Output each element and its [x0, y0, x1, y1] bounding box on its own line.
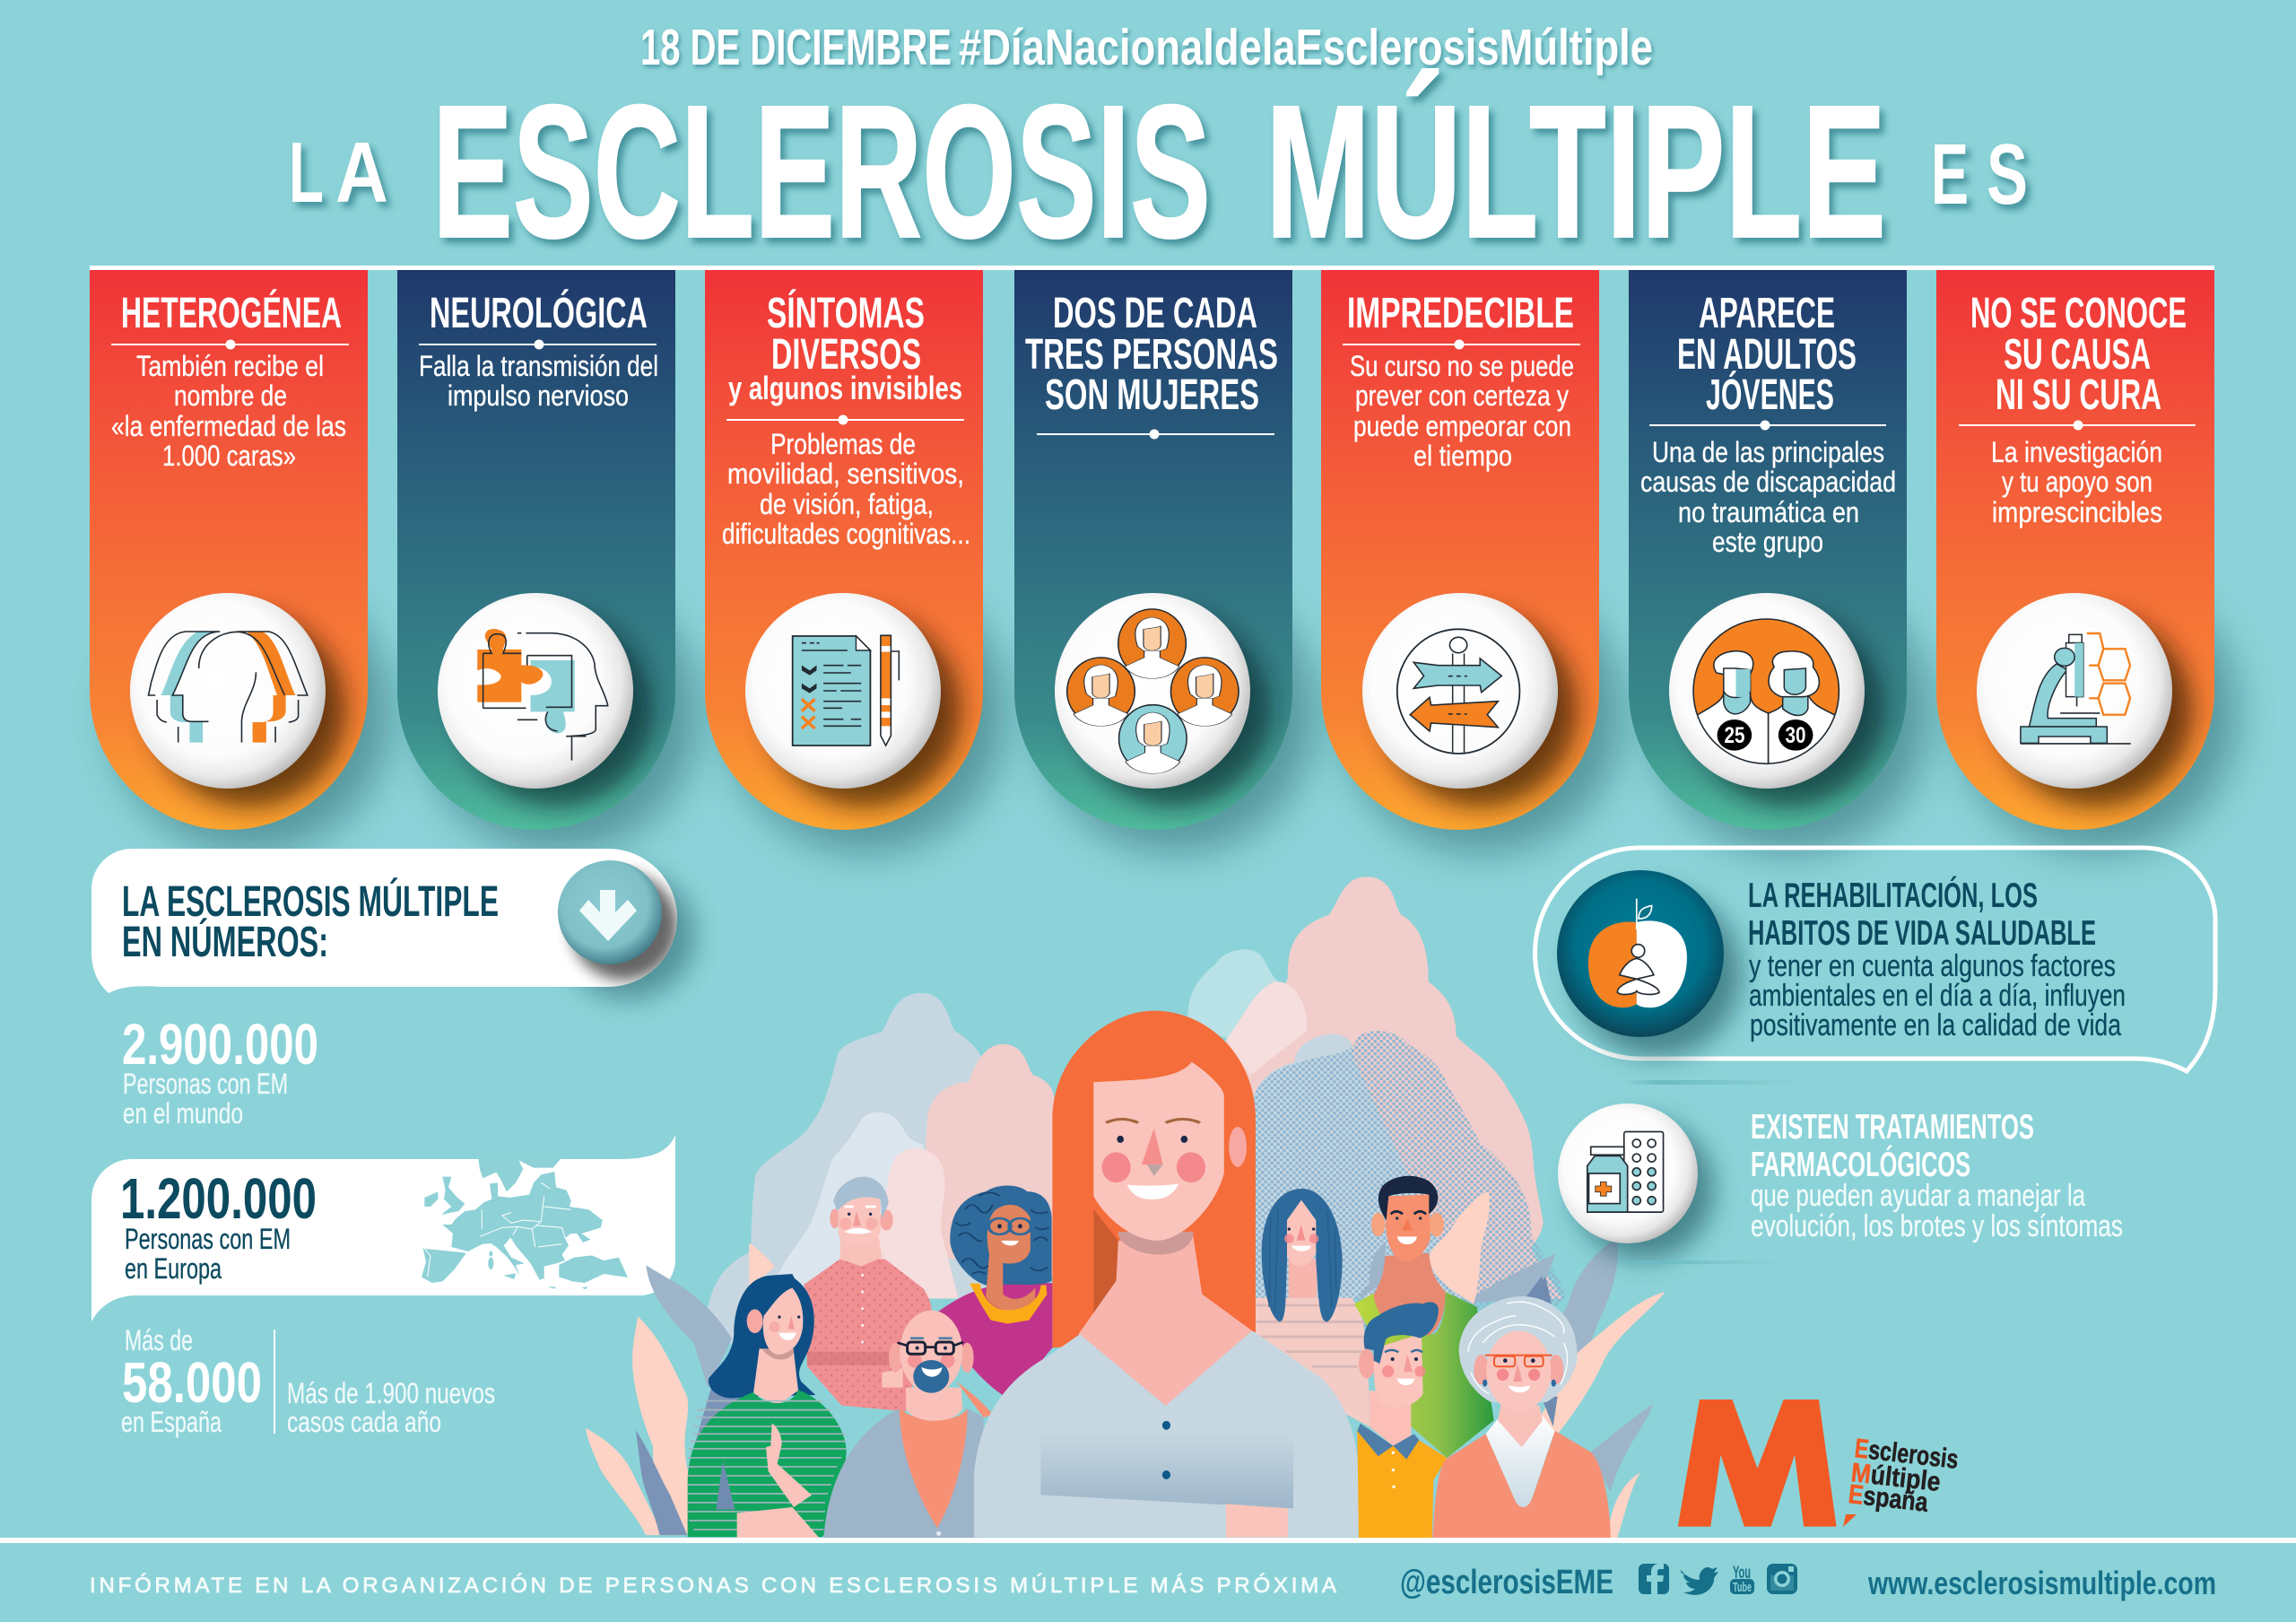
icon labels: ages: 25: [1724, 723, 1745, 748]
person: bald man with glasses: [823, 1311, 993, 1539]
panel: rehabilitación callout: [1535, 848, 2215, 1085]
icon: young adults: [1692, 619, 1840, 769]
panel: dos de cada tres: DOS DE CADA: [1053, 290, 1257, 337]
stat: mundo: [122, 1012, 318, 1129]
stat: españa: casos cada año: [287, 1406, 441, 1438]
footer handle: @esclerosisEME: [1400, 1564, 1613, 1601]
panel: síntomas diversos: Problemas de: [770, 428, 916, 460]
stat: mundo: 2.900.000: [122, 1012, 318, 1077]
panel: tratamientos: [1558, 1103, 2123, 1264]
panel: impredecible: [1321, 270, 1622, 852]
panel: síntomas diversos: SÍNTOMAS: [767, 289, 925, 337]
panel: no se conoce su causa: [1936, 270, 2237, 852]
icon: puzzle head: [477, 629, 608, 761]
panel: heterogénea: [90, 270, 390, 852]
panel: heterogénea: También recibe el: [136, 350, 324, 382]
panel: rehabilitación callout: y tener en cuenta algunos factores: [1749, 949, 2116, 983]
icon: facebook: [1639, 1564, 1669, 1594]
panel: aparece en adultos jóvenes: JÓVENES: [1706, 370, 1834, 419]
title: S: [1987, 126, 2028, 222]
icon: four people: [1067, 609, 1239, 773]
panel: europa: en Europa: [125, 1252, 222, 1285]
top rule: [90, 266, 2214, 270]
stat: mundo: Personas con EM: [123, 1068, 288, 1100]
icon labels: ages: [1724, 723, 1806, 748]
panel: neurológica: NEUROLÓGICA: [430, 288, 648, 337]
logo: Esclerosis Múltiple España: Múltiple: [1849, 1458, 1942, 1497]
panel: europa: Personas con EM: [125, 1223, 291, 1255]
panel: impredecible: el tiempo: [1413, 440, 1512, 472]
panel: tratamientos: que pueden ayudar a manejar la: [1751, 1179, 2085, 1213]
stat: mundo: en el mundo: [123, 1097, 243, 1129]
footer website: www.esclerosismultiple.com: [1867, 1565, 2216, 1601]
panel: dos de cada tres: [1014, 270, 1315, 852]
stat: españa: en España: [121, 1406, 222, 1438]
icon: signpost: [1397, 629, 1519, 754]
panel: europa: [91, 1135, 675, 1321]
date and hashtag heading: [640, 19, 1653, 76]
icons row right: people, signpost, ages, microscope: [1067, 609, 2131, 773]
panel: aparece en adultos jóvenes: Una de las principales: [1652, 436, 1884, 468]
footer rule: [0, 1538, 2296, 1543]
panel: rehabilitación callout: HABITOS DE VIDA SALUDABLE: [1748, 914, 2096, 953]
panel: impredecible: Su curso no se puede: [1350, 350, 1574, 382]
logo: Esclerosis Múltiple España: Esclerosis: [1853, 1434, 1960, 1475]
panel: dos de cada tres: SON MUJERES: [1045, 371, 1259, 419]
panel: heterogénea: HETEROGÉNEA: [121, 289, 342, 337]
date and hashtag heading: #DíaNacionaldelaEsclerosisMúltiple: [959, 19, 1653, 76]
icon: medicine bottle and pills: [1558, 1103, 1698, 1243]
panel: no se conoce su causa: imprescincibles: [1992, 496, 2162, 528]
person: older woman: [1432, 1277, 1611, 1539]
panel: aparece en adultos jóvenes: APARECE: [1699, 290, 1835, 337]
stat: españa: Más de 1.900 nuevos: [287, 1377, 495, 1409]
title: A: [335, 125, 388, 221]
stat: españa: 58.000: [122, 1350, 262, 1415]
panel: europa: 1.200.000: [120, 1166, 317, 1231]
person: man with curly dark hair: [1354, 1176, 1494, 1458]
panel: impredecible: IMPREDECIBLE: [1347, 290, 1574, 337]
panel: neurológica: impulso nervioso: [448, 379, 629, 412]
map of Europe: [422, 1159, 628, 1289]
person: curly hair woman: [938, 1186, 1052, 1399]
panel: síntomas diversos: [705, 270, 1005, 852]
icon: down arrow button: [558, 860, 662, 964]
panel: heterogénea: 1.000 caras»: [162, 440, 296, 472]
icon: apple with meditating person: [1557, 870, 1724, 1037]
icon labels: ages: 30: [1785, 723, 1806, 748]
panel: rehabilitación callout: LA REHABILITACIÓN, LOS: [1748, 876, 2038, 915]
person: woman in green stripes: [688, 1274, 847, 1538]
panel: síntomas diversos: dificultades cognitivas...: [722, 518, 970, 550]
panel: síntomas diversos: de visión, fatiga,: [760, 488, 934, 520]
date and hashtag heading: 18 DE DICIEMBRE: [640, 19, 952, 76]
stat: españa: [121, 1324, 495, 1438]
panel: neurológica: Falla la transmisión del: [419, 350, 658, 382]
panel: tratamientos: FARMACOLÓGICOS: [1751, 1145, 1970, 1184]
panel: neurológica: [397, 270, 698, 852]
icon: heads: [149, 632, 308, 743]
title: ESCLEROSIS: [432, 65, 1211, 277]
person: woman with long blue hair: [1256, 1189, 1370, 1426]
person: older man: [804, 1177, 932, 1411]
panel: rehabilitación callout: ambientales en el día a día, influyen: [1749, 979, 2126, 1013]
panel: dos de cada tres: TRES PERSONAS: [1025, 331, 1278, 379]
logo: Esclerosis Múltiple España: España: [1847, 1479, 1930, 1518]
panel: aparece en adultos jóvenes: EN ADULTOS: [1677, 331, 1857, 379]
title: L: [289, 125, 324, 221]
panel: aparece en adultos jóvenes: no traumática en: [1678, 496, 1859, 528]
logo: Esclerosis Múltiple España: [1678, 1400, 1960, 1527]
stat: españa: Más de: [125, 1324, 193, 1356]
panel: rehabilitación callout: positivamente en la calidad de vida: [1750, 1008, 2121, 1042]
icon: checklist and pencil: [793, 635, 899, 746]
panel: heterogénea: «la enfermedad de las: [111, 410, 346, 442]
panel: aparece en adultos jóvenes: causas de discapacidad: [1640, 466, 1896, 498]
person: young man with polo: [1357, 1302, 1447, 1539]
panel: síntomas diversos: y algunos invisibles: [728, 370, 962, 406]
title: MÚLTIPLE: [1265, 65, 1886, 277]
panel: tratamientos: evolución, los brotes y los síntomas: [1751, 1209, 2123, 1243]
clouds and leaves behind: [586, 876, 1665, 1538]
panel: en números pill: [91, 849, 695, 999]
footer message: INFÓRMATE EN LA ORGANIZACIÓN DE PERSONAS CON ESCLEROSIS MÚLTIPLE MÁS PRÓXIMA: [90, 1574, 1336, 1598]
panel: síntomas diversos: movilidad, sensitivos,: [727, 458, 964, 490]
panel: no se conoce su causa: SU CAUSA: [2004, 331, 2151, 379]
title: E: [1931, 126, 1969, 222]
icon: youtube: [1730, 1564, 1754, 1595]
icon: twitter: [1681, 1567, 1718, 1595]
panel: aparece en adultos jóvenes: [1629, 270, 1929, 852]
panel: impredecible: puede empeorar con: [1353, 410, 1571, 442]
panel: aparece en adultos jóvenes: este grupo: [1712, 526, 1823, 558]
panel: tratamientos: EXISTEN TRATAMIENTOS: [1751, 1108, 2034, 1147]
icon: youtube: Tube: [1733, 1580, 1752, 1595]
panel: no se conoce su causa: y tu apoyo son: [2002, 466, 2152, 498]
panel: heterogénea: nombre de: [174, 379, 287, 412]
panel: en números pill: EN NÚMEROS:: [122, 917, 328, 966]
panel: no se conoce su causa: NI SU CURA: [1996, 371, 2161, 419]
icon: instagram: [1767, 1564, 1797, 1594]
person: main woman with red hair: [974, 1011, 1359, 1538]
icon: microscope: [2021, 633, 2131, 744]
panel: no se conoce su causa: NO SE CONOCE: [1970, 290, 2187, 337]
panel: síntomas diversos: DIVERSOS: [771, 331, 921, 379]
panel: impredecible: prever con certeza y: [1355, 379, 1569, 412]
icon: youtube: You: [1733, 1564, 1751, 1583]
panel: no se conoce su causa: La investigación: [1991, 436, 2162, 468]
icons row left: heads, puzzle, checklist: [149, 629, 899, 761]
illustration: group of people: [586, 876, 1665, 1539]
panel: en números pill: LA ESCLEROSIS MÚLTIPLE: [122, 876, 499, 926]
